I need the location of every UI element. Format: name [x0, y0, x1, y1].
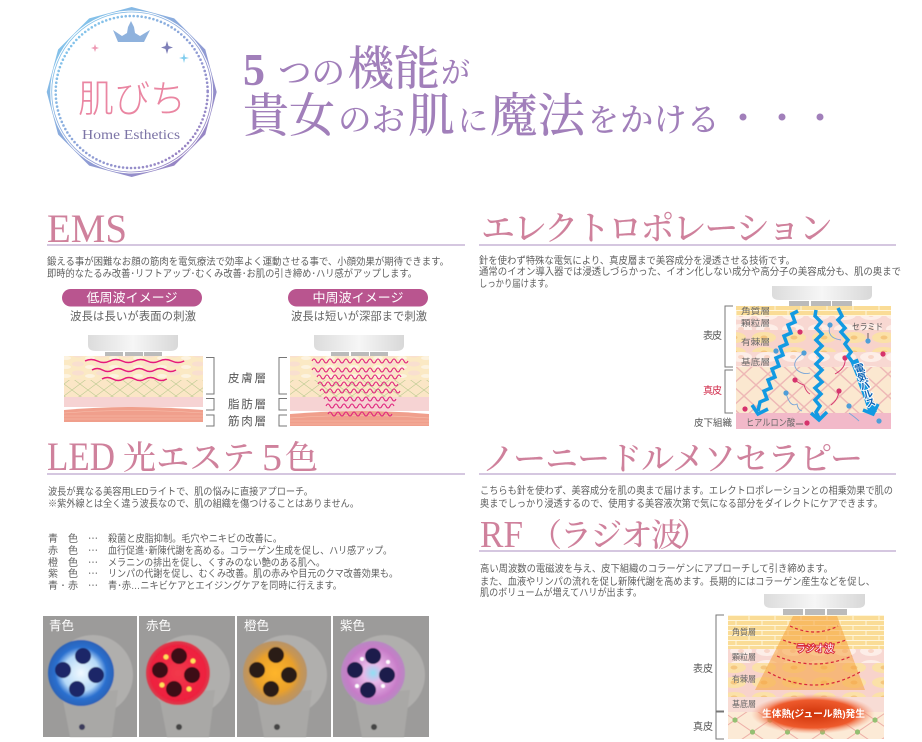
- layer brackets and labels: 脂肪層: [228, 397, 266, 411]
- list: colour effects: ⋯: [88, 581, 98, 592]
- list: colour effects: ⋯: [88, 546, 98, 557]
- panel: electroporation: [479, 211, 901, 429]
- labels: skin layers: ヒアルロン酸: [746, 417, 795, 429]
- photo: purple: [333, 616, 429, 737]
- heading: RF: [480, 514, 709, 556]
- text: EMS description: 鍛える事が困難なお顔の筋肉を電気療法で効率よく運動させる事で、小顔効果が期待できます。: [47, 255, 449, 268]
- list: colour effects: 青色: [48, 532, 78, 545]
- text: LED description: ※紫外線とは全く違う波長なので、肌の組織を傷つけることはありません。: [48, 497, 359, 510]
- photo: blue: [43, 616, 137, 737]
- pill: low frequency: [62, 289, 202, 306]
- caption: mid frequency: 波長は短いが深部まで刺激: [291, 309, 427, 323]
- text: LED description: [48, 485, 359, 510]
- pill: mid frequency: 中周波イメージ: [312, 290, 404, 305]
- labels: skin layers: 角質層: [741, 306, 770, 316]
- labels: RF: ラジオ波: [796, 642, 834, 655]
- pill: mid frequency: [288, 289, 428, 306]
- title: 5: [243, 44, 265, 95]
- text: electroporation description: 通常のイオン導入器では浸透しづらかった、イオン化しない成分や高分子の美容成分も、肌の奥まで: [479, 265, 901, 278]
- heading: RF: ラジオ波: [560, 517, 683, 553]
- title: [243, 44, 824, 143]
- heading: RF: ）: [677, 517, 709, 553]
- labels: RF: [693, 627, 866, 733]
- labels: skin layers: 皮下組織: [694, 417, 732, 429]
- text: electroporation description: [479, 254, 901, 290]
- layer brackets and labels: 筋肉層: [228, 414, 266, 428]
- logo: Home Esthetics badge: 肌びち: [78, 79, 186, 121]
- molecules: [742, 322, 886, 426]
- list: colour effects: ⋯: [88, 558, 98, 569]
- pill: low frequency: 低周波イメージ: [86, 291, 178, 305]
- list: colour effects: 青･赤: [48, 579, 78, 592]
- label: electric pulse: 電気パルス: [851, 362, 876, 409]
- labels: skin layers: セラミド: [852, 322, 883, 332]
- labels: RF: 顆粒層: [732, 652, 756, 662]
- labels: RF: 角質層: [732, 627, 756, 637]
- diagram: RF skin: [693, 594, 884, 739]
- title: つの: [278, 56, 345, 92]
- heading: RF: RF: [480, 514, 523, 556]
- list: colour effects: 青･赤…ニキビケアとエイジングケアを同時に行えます。: [108, 579, 342, 592]
- labels: skin layers: 基底層: [741, 357, 770, 367]
- diagram: low frequency skin: [64, 335, 203, 422]
- photo: red: 赤色: [146, 619, 171, 633]
- text: RF description: また、血液やリンパの流れを促し新陳代謝を高めます。長期的にはコラーゲン産生などを促し、: [480, 575, 875, 588]
- list: colour effects: リンパの代謝を促し、むくみ改善。肌の赤みや目元のクマ改善効果も。: [108, 567, 398, 580]
- text: EMS description: 即時的なたるみ改善･リフトアップ･むくみ改善･お肌の引き締め･ハリ感がアップします。: [47, 267, 417, 280]
- photo: red: [139, 616, 235, 737]
- text: RF description: [480, 562, 875, 599]
- heading: LED: LED: [47, 434, 115, 479]
- heading: no-needle mesotherapy: ノーニードルメソセラピー: [482, 442, 863, 478]
- diagram: mid frequency skin: [290, 335, 429, 426]
- text: RF description: 肌のボリュームが増えてハリが出ます。: [480, 586, 642, 599]
- text: RF description: 高い周波数の電磁波を与え、皮下組織のコラーゲンにアプローチして引き締めます。: [480, 562, 833, 575]
- title: かける: [620, 103, 720, 139]
- labels: RF: 真皮: [693, 720, 713, 733]
- title: 機能: [348, 44, 440, 96]
- photo: orange: [237, 616, 331, 737]
- heading: LED: 5: [262, 437, 282, 479]
- photo: orange: 橙色: [244, 618, 269, 633]
- labels: skin layers: 真皮: [703, 384, 722, 397]
- list: colour effects: メラニンの排出を促し、くすみのない艶のある肌へ。: [108, 556, 325, 569]
- text: electroporation description: しっかり届けます。: [479, 278, 553, 290]
- panel: RF: [479, 514, 896, 739]
- title: を: [588, 103, 619, 138]
- text: mesotherapy description: 奥までしっかり浸透するので、使用する美容液次第で気になる部分をダイレクトにケアできます。: [480, 497, 883, 510]
- panel: EMS: [47, 206, 465, 428]
- list: colour effects: 血行促進･新陳代謝を高める。コラーゲン生成を促し、ハリ感アップ。: [108, 544, 392, 557]
- heading: LED: [47, 434, 318, 479]
- labels: skin layers: 表皮: [703, 329, 722, 342]
- list: colour effects: [48, 532, 398, 592]
- heading: LED: 色: [285, 440, 318, 477]
- title: に: [458, 105, 488, 138]
- labels: skin layers: [694, 306, 883, 429]
- labels: RF: 生体熱(ジュール熱)発生: [762, 708, 866, 720]
- title: 魔法: [490, 91, 587, 143]
- labels: RF: 基底層: [732, 699, 756, 709]
- list: colour effects: 殺菌と皮脂抑制。毛穴やニキビの改善に。: [108, 532, 282, 545]
- layer brackets and labels: [206, 358, 287, 428]
- RF cone: [755, 616, 865, 690]
- text: mesotherapy description: [480, 484, 893, 510]
- caption: low frequency: 波長は長いが表面の刺激: [70, 309, 196, 323]
- logo: Home Esthetics badge: [47, 7, 217, 177]
- list: colour effects: 橙色: [48, 556, 78, 569]
- heat zone: [751, 694, 875, 734]
- panel: no-needle mesotherapy: [479, 442, 896, 510]
- title: 貴女: [243, 91, 335, 143]
- diagram: electroporation skin: [694, 286, 891, 429]
- photo: purple: 紫色: [340, 619, 365, 633]
- labels: RF: 有棘層: [732, 674, 756, 684]
- title: のお: [338, 103, 405, 139]
- labels: RF: 表皮: [693, 662, 713, 675]
- heading: LED: 光エステ: [123, 440, 255, 477]
- list: colour effects: ⋯: [88, 534, 98, 545]
- heading: electroporation: エレクトロポレーション: [481, 211, 833, 248]
- logo: Home Esthetics badge: Home Esthetics: [82, 127, 180, 142]
- heading: RF: （: [530, 517, 562, 553]
- labels: skin layers: 有棘層: [741, 337, 770, 347]
- text: mesotherapy description: こちらも針を使わず、美容成分を肌の奥まで届けます。エレクトロポレーションとの相乗効果で肌の: [480, 484, 893, 497]
- list: colour effects: ⋯: [88, 569, 98, 580]
- text: LED description: 波長が異なる美容用LEDライトで、肌の悩みに直接アプローチ。: [48, 485, 313, 498]
- list: colour effects: 赤色: [48, 545, 78, 557]
- title: 肌: [408, 91, 455, 143]
- labels: skin layers: 顆粒層: [741, 318, 770, 328]
- heading: EMS: EMS: [47, 206, 127, 251]
- list: colour effects: 紫色: [48, 567, 78, 580]
- panel: LED: [43, 434, 465, 737]
- text: EMS description: [47, 255, 449, 280]
- arrows: electric pulses: [752, 308, 878, 420]
- photo: blue: 青色: [49, 619, 74, 633]
- layer brackets and labels: 皮膚層: [228, 371, 266, 385]
- text: electroporation description: 針を使わず特殊な電気により、真皮層まで美容成分を浸透させる技術です。: [479, 254, 795, 267]
- title: が: [441, 57, 470, 90]
